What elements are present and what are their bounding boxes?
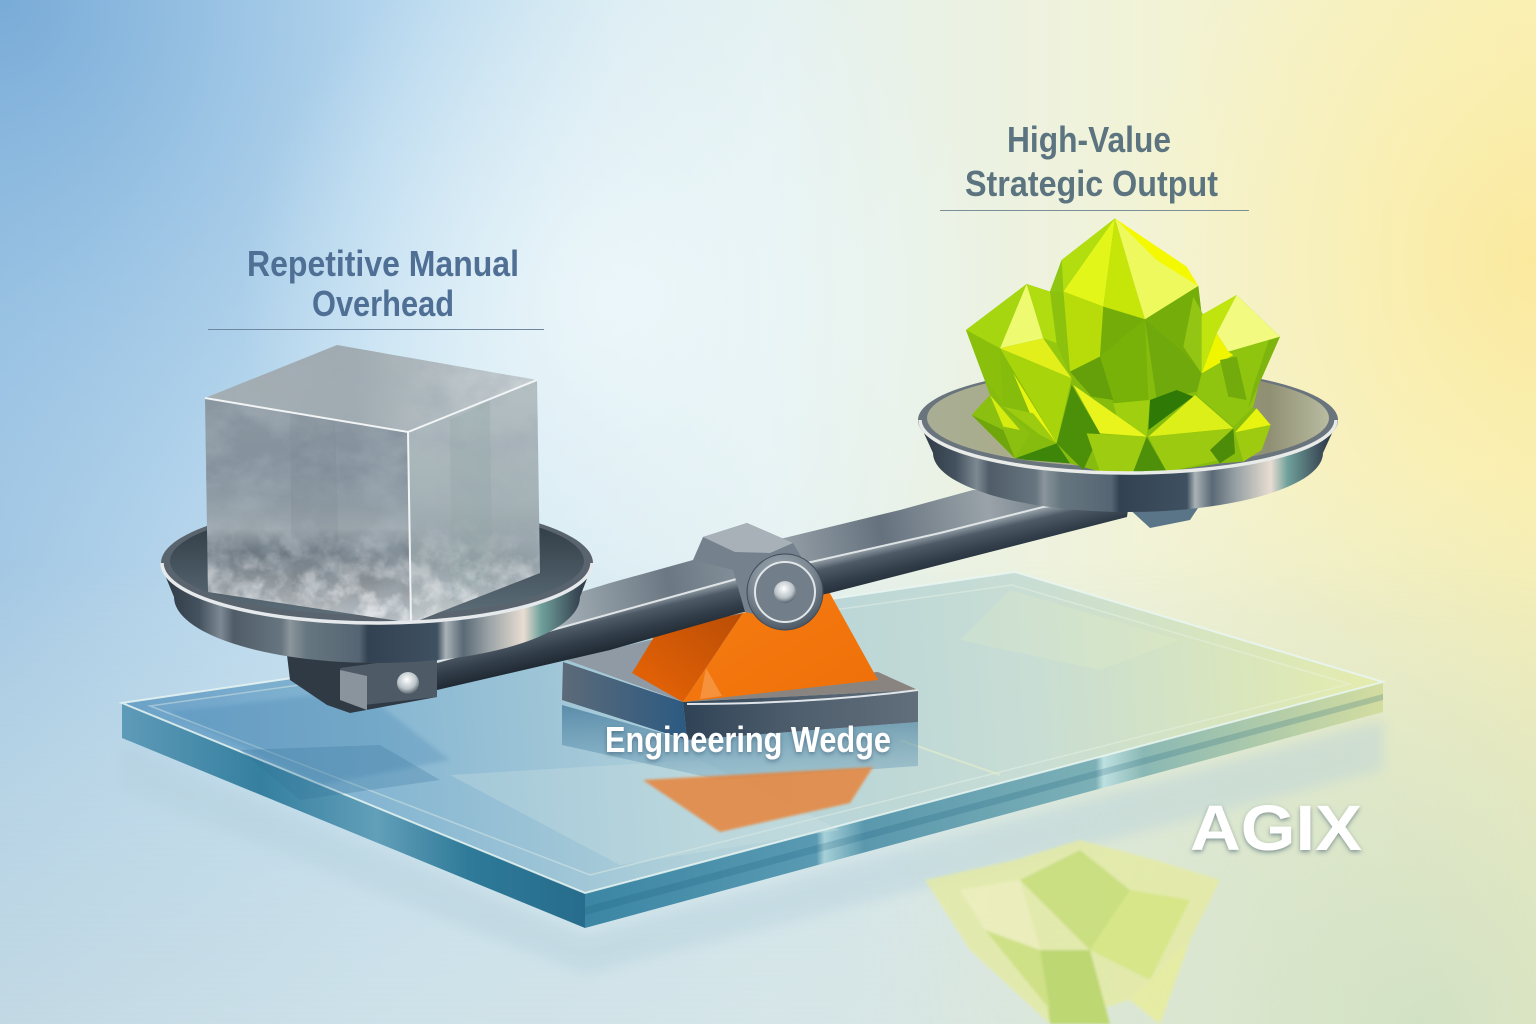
label: repetitive manual overhead: [208, 243, 544, 330]
beam top face: [500, 490, 1130, 645]
cube right face: [408, 380, 540, 623]
small right crystal: [1235, 408, 1271, 462]
label: engineering wedge: Engineering Wedge: [605, 719, 891, 760]
left pan: [160, 503, 593, 663]
right pan front rim: [920, 420, 1336, 473]
left pan rim: [161, 503, 593, 623]
beam front face: [437, 495, 1130, 690]
label: repetitive manual overhead: Overhead: [312, 283, 454, 324]
glass top surface: [122, 572, 1383, 893]
crystal silhouette: [966, 218, 1280, 472]
right pan rim: [918, 367, 1338, 473]
steel cube: [205, 345, 540, 625]
right pan: [918, 367, 1338, 512]
glass front-right edge: [585, 682, 1383, 928]
pivot bracket and bolt: [693, 523, 823, 630]
small left crystal: [972, 395, 1070, 463]
label: high-value strategic output: High-Value: [1007, 119, 1171, 160]
cube left face: [205, 398, 412, 623]
right crystal: [1197, 295, 1280, 427]
left crystal: [966, 284, 1072, 443]
left pan front rim: [162, 563, 592, 623]
label: high-value strategic output: [940, 119, 1249, 210]
balance beam: [437, 490, 1130, 690]
pivot base slab: [562, 640, 918, 740]
left pan band: [160, 563, 593, 663]
left pan inside: [170, 507, 584, 615]
logo: AGIX: AGIX: [1190, 792, 1362, 864]
right pan band: [918, 420, 1338, 512]
floor reflections: [122, 720, 1383, 1024]
main crystal: [1050, 218, 1203, 437]
label: repetitive manual overhead: Repetitive Manual: [247, 243, 519, 284]
reflection of pivot base and wedge in glass: [562, 705, 918, 832]
cube top face: [205, 345, 537, 432]
orange engineering wedge: [632, 588, 878, 702]
left pan bracket: [287, 655, 437, 713]
glass front-left edge: [122, 703, 585, 928]
right pan bracket: [1125, 505, 1200, 528]
bottom centre crystals: [1057, 385, 1235, 472]
green crystal cluster: [966, 218, 1280, 472]
pivot disk: [747, 554, 823, 630]
glass platform: [122, 572, 1383, 928]
pivot pin: [774, 581, 796, 603]
label: high-value strategic output: Strategic Output: [965, 163, 1218, 204]
right pan inside: [927, 369, 1329, 467]
